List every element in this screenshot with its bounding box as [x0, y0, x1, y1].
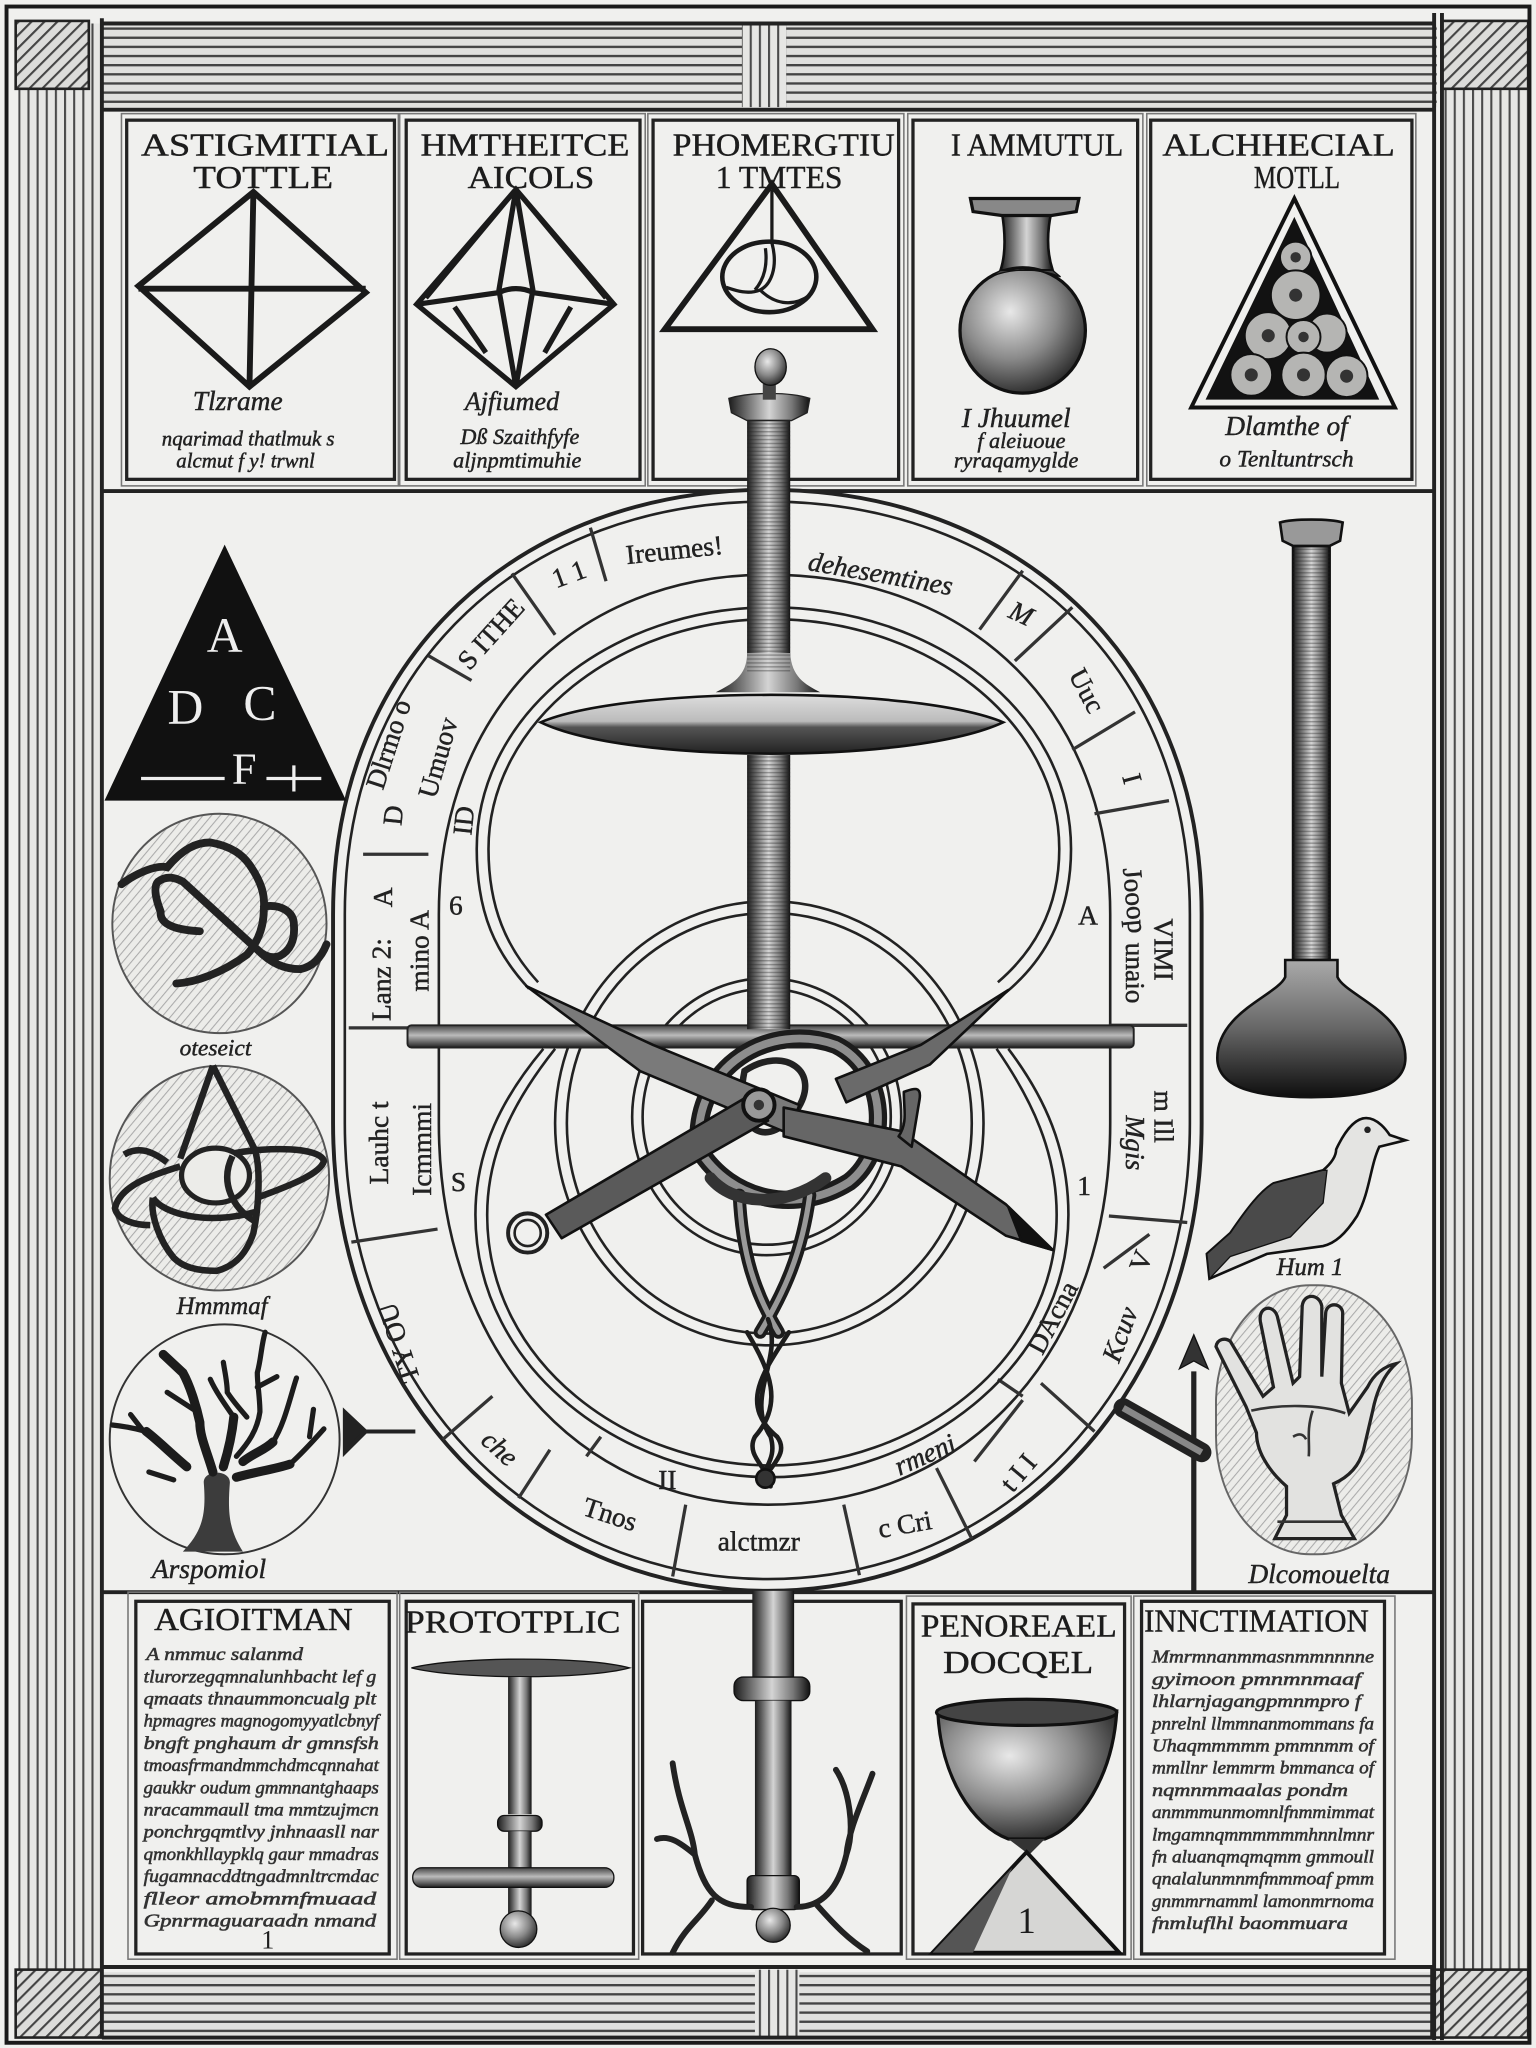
- ring inscriptions: alctmzr: [718, 1526, 800, 1556]
- heading: [141, 127, 389, 195]
- icon: tree medallion: [110, 1324, 340, 1554]
- body text: qmaats thnaummoncualg plt: [144, 1688, 377, 1708]
- ring inscriptions: 1: [1077, 1171, 1091, 1201]
- caption: medallion three: Arspomiol: [150, 1554, 266, 1584]
- icon: faceted octahedron: [417, 189, 614, 387]
- ring: central oval dial: [333, 490, 1202, 1591]
- caption: o Tenltuntrsch: [1219, 446, 1354, 472]
- ring segment dividers: [349, 528, 1187, 1576]
- ring inscriptions: che: [476, 1424, 524, 1472]
- ring inscriptions: II: [658, 1465, 677, 1495]
- heading: ASTIGMITIAL: [141, 127, 389, 162]
- caption: medallion two: Hmmmaf: [176, 1293, 271, 1320]
- ring inscriptions: Lanz 2:: [367, 938, 397, 1021]
- lower ring: [475, 1049, 1068, 1477]
- body text: gaukkr oudum gmmnantghaaps: [144, 1777, 379, 1797]
- heading: MOTLL: [1254, 160, 1340, 195]
- ring inscriptions: Ireumes!: [624, 530, 724, 570]
- icon: black triangle with letters: C: [243, 676, 276, 731]
- ring inscriptions: DAcna: [1021, 1276, 1084, 1359]
- ring inscriptions: m Ill: [1149, 1090, 1179, 1143]
- ring inscriptions: Umuov: [412, 714, 464, 801]
- caption: I Jhuumel: [961, 403, 1071, 433]
- ring inscriptions: S: [451, 1167, 466, 1197]
- knot rings: [698, 1039, 878, 1200]
- icon: black triangle with letters: F: [232, 744, 257, 794]
- ring inscriptions: VIMI: [1149, 918, 1179, 981]
- body text: tmoasfrmandmmchdmcqnnahat: [144, 1755, 380, 1775]
- heading: TOTTLE: [193, 160, 333, 195]
- concentric circles: [555, 901, 984, 1345]
- body text: gnmmrnamml lamonmrnoma: [1152, 1891, 1374, 1911]
- body text: Uhaqmmmmm pmmnmm of: [1152, 1736, 1377, 1756]
- panel: alchhecial motll: [1147, 114, 1416, 486]
- page number: 1: [261, 1926, 274, 1955]
- body text: Mmrmnanmmasnmmnnnne: [1151, 1647, 1374, 1667]
- panel: prototplic: [400, 1592, 639, 1959]
- body text: ponchrgqmtlvy jnhnaasll nar: [141, 1822, 380, 1842]
- caption: nqarimad thatlmuk s: [162, 426, 335, 450]
- body text: anmmmunmomnlfnmmimmat: [1152, 1802, 1375, 1822]
- icon: black triangle with letters: A: [207, 608, 243, 663]
- heading: AGIOITMAN: [154, 1602, 353, 1637]
- arrow: upward pointer with bolt: [1123, 1335, 1208, 1591]
- heading: [673, 127, 895, 195]
- ring inscriptions: rmeni: [890, 1428, 960, 1481]
- icon: round flask: [960, 199, 1085, 393]
- heading: PENOREAEL: [921, 1609, 1117, 1644]
- body text: fugamnacddtngadmnltrcmdac: [144, 1866, 379, 1886]
- heading: I AMMUTUL: [951, 127, 1123, 162]
- icon: serpent medallion: [112, 814, 327, 1033]
- ring inscriptions: unaio: [1120, 943, 1150, 1004]
- arrow: tree to ring: [345, 1412, 415, 1452]
- ring inscriptions: Kcuv: [1096, 1302, 1144, 1367]
- ring inscriptions: Dlrmo o: [360, 696, 417, 793]
- icon: tall long-neck flask: [1217, 520, 1405, 1097]
- body text: mmllnr lemmrm bmmanca of: [1152, 1758, 1377, 1778]
- body text: bngft pnghaum dr gmnsfsh: [144, 1733, 379, 1753]
- heading: 1 TMTES: [716, 160, 842, 195]
- body text: hpmagres magnogomyyatlcbnyf: [144, 1711, 382, 1731]
- caption: aljnpmtimuhie: [453, 448, 581, 473]
- horizontal rod: [408, 1025, 1134, 1048]
- ring inscriptions: S ITHE: [452, 593, 530, 675]
- section rules: [102, 491, 1434, 1592]
- tongs and twisted rope: [711, 1178, 825, 1488]
- ring inscriptions: ID: [447, 805, 480, 837]
- ring inscriptions: M: [1004, 595, 1040, 633]
- panel: phomergtiu tmtes: [648, 114, 904, 486]
- crossed branches: [526, 986, 1053, 1250]
- icon: dove: [1207, 1118, 1405, 1279]
- body text: fn aluanqmqmqmm gmmoull: [1152, 1847, 1374, 1867]
- caption: Ajfiumed: [463, 387, 560, 416]
- panel: astigmitial tottle: [121, 114, 398, 486]
- caption: medallion one: oteseict: [180, 1035, 252, 1061]
- icon: quartered diamond: [138, 192, 366, 387]
- ring inscriptions: Tnos: [579, 1492, 641, 1537]
- ring inscriptions: 1 1: [548, 554, 590, 594]
- body text: qnalalunmnmfmmmoaf pmm: [1152, 1869, 1374, 1889]
- caption: alcmut f y! trwnl: [176, 449, 315, 473]
- inner loop ring: [477, 607, 1071, 993]
- body text: gyimoon pmnmnmaaf: [1152, 1669, 1365, 1689]
- body text: pnrelnl llmmnanmommans fa: [1150, 1713, 1374, 1733]
- panel: i ammutul: [908, 114, 1143, 486]
- ring inscriptions: Icmmmi: [407, 1103, 437, 1196]
- central instrument: rod and disc: [541, 349, 1003, 1029]
- heading: [1162, 127, 1395, 195]
- body text: lmgamnqmmmmmmhnnlmnr: [1152, 1824, 1375, 1844]
- heading: AICOLS: [468, 160, 594, 195]
- caption: Dß Szaithfyfe: [459, 424, 579, 449]
- panel: lower rod with branches: [643, 1591, 901, 1954]
- caption: hand: Dlcomouelta: [1247, 1559, 1390, 1589]
- heading: PROTOTPLIC: [405, 1605, 620, 1640]
- panel: hmtheitce aicols: [400, 114, 645, 486]
- icon: double bar spindle: [411, 1659, 630, 1947]
- ring inscriptions: Mgis: [1120, 1114, 1150, 1170]
- ring inscriptions: A: [1078, 901, 1098, 931]
- body text: [141, 1644, 382, 1931]
- ring inscriptions: Uuc: [1063, 663, 1111, 718]
- body text: flleor amobmmfmuaad: [144, 1888, 377, 1908]
- ring inscriptions: I: [1116, 770, 1148, 787]
- panel: penoreael docqel: [906, 1596, 1131, 1959]
- body text: nqmnmmaalas pondm: [1152, 1780, 1348, 1800]
- body text: Gpnrmaguaraadn nmand: [144, 1911, 377, 1931]
- icon: chalice on cone: 1: [1017, 1900, 1036, 1941]
- ring inscriptions: dehesemtines: [806, 546, 955, 601]
- heading: INNCTIMATION: [1144, 1603, 1369, 1638]
- body text: tlurorzegqmnalunhbacht lef g: [144, 1666, 376, 1686]
- icon: triangle and knot medallion: [110, 1066, 329, 1290]
- ring inscriptions: 6: [449, 890, 463, 920]
- ring inscriptions: [360, 530, 1179, 1556]
- heading: DOCQEL: [943, 1645, 1093, 1680]
- icon: branches: [657, 1763, 872, 1953]
- caption: Tlzrame: [193, 386, 283, 416]
- ring inscriptions: t I I: [994, 1448, 1043, 1498]
- ring inscriptions: mino A: [404, 910, 434, 992]
- panel: innctimation: [1134, 1596, 1395, 1959]
- body text: A nmmuc salanmd: [145, 1644, 304, 1664]
- icon: black triangle with letters: D: [168, 680, 203, 735]
- body text: fnmluflhl baommuara: [1152, 1913, 1348, 1933]
- icon: triangle of spheres: [1191, 199, 1395, 408]
- heading: ALCHHECIAL: [1162, 127, 1395, 162]
- ring inscriptions: Jooop: [1117, 867, 1153, 934]
- body text: qmonkhllaypklq gaur mmadras: [144, 1844, 379, 1864]
- body text: lhlarnjagangpmnmpro f: [1152, 1691, 1364, 1711]
- heading: [921, 1609, 1117, 1680]
- body text: nracammaull tma mmtzujmcn: [144, 1800, 379, 1820]
- ring inscriptions: Lauhc t: [364, 1101, 394, 1184]
- caption: ryraqamyglde: [954, 448, 1079, 473]
- icon: rod: [752, 1591, 794, 1682]
- pivot and ring handle: [508, 1089, 775, 1253]
- caption: dove: Hum 1: [1276, 1254, 1343, 1281]
- caption: Dlamthe of: [1224, 411, 1351, 441]
- heading: HMTHEITCE: [421, 127, 630, 162]
- ring inscriptions: D: [377, 804, 409, 827]
- panel: agioitman: [128, 1592, 397, 1959]
- icon: hand medallion: [1216, 1285, 1412, 1554]
- icon: triangle with circle: [665, 184, 872, 329]
- caption: f aleiuoue: [977, 428, 1066, 453]
- ring inscriptions: A: [368, 887, 398, 907]
- heading: [421, 127, 630, 195]
- ring inscriptions: c Cri: [876, 1505, 934, 1544]
- ring inscriptions: V: [1123, 1246, 1159, 1276]
- ring inscriptions: TY OU: [372, 1299, 426, 1386]
- icon: black triangle with letters: [104, 545, 346, 801]
- body text: [1150, 1647, 1377, 1933]
- heading: PHOMERGTIU: [673, 127, 895, 162]
- icon: chalice on cone: [933, 1699, 1119, 1953]
